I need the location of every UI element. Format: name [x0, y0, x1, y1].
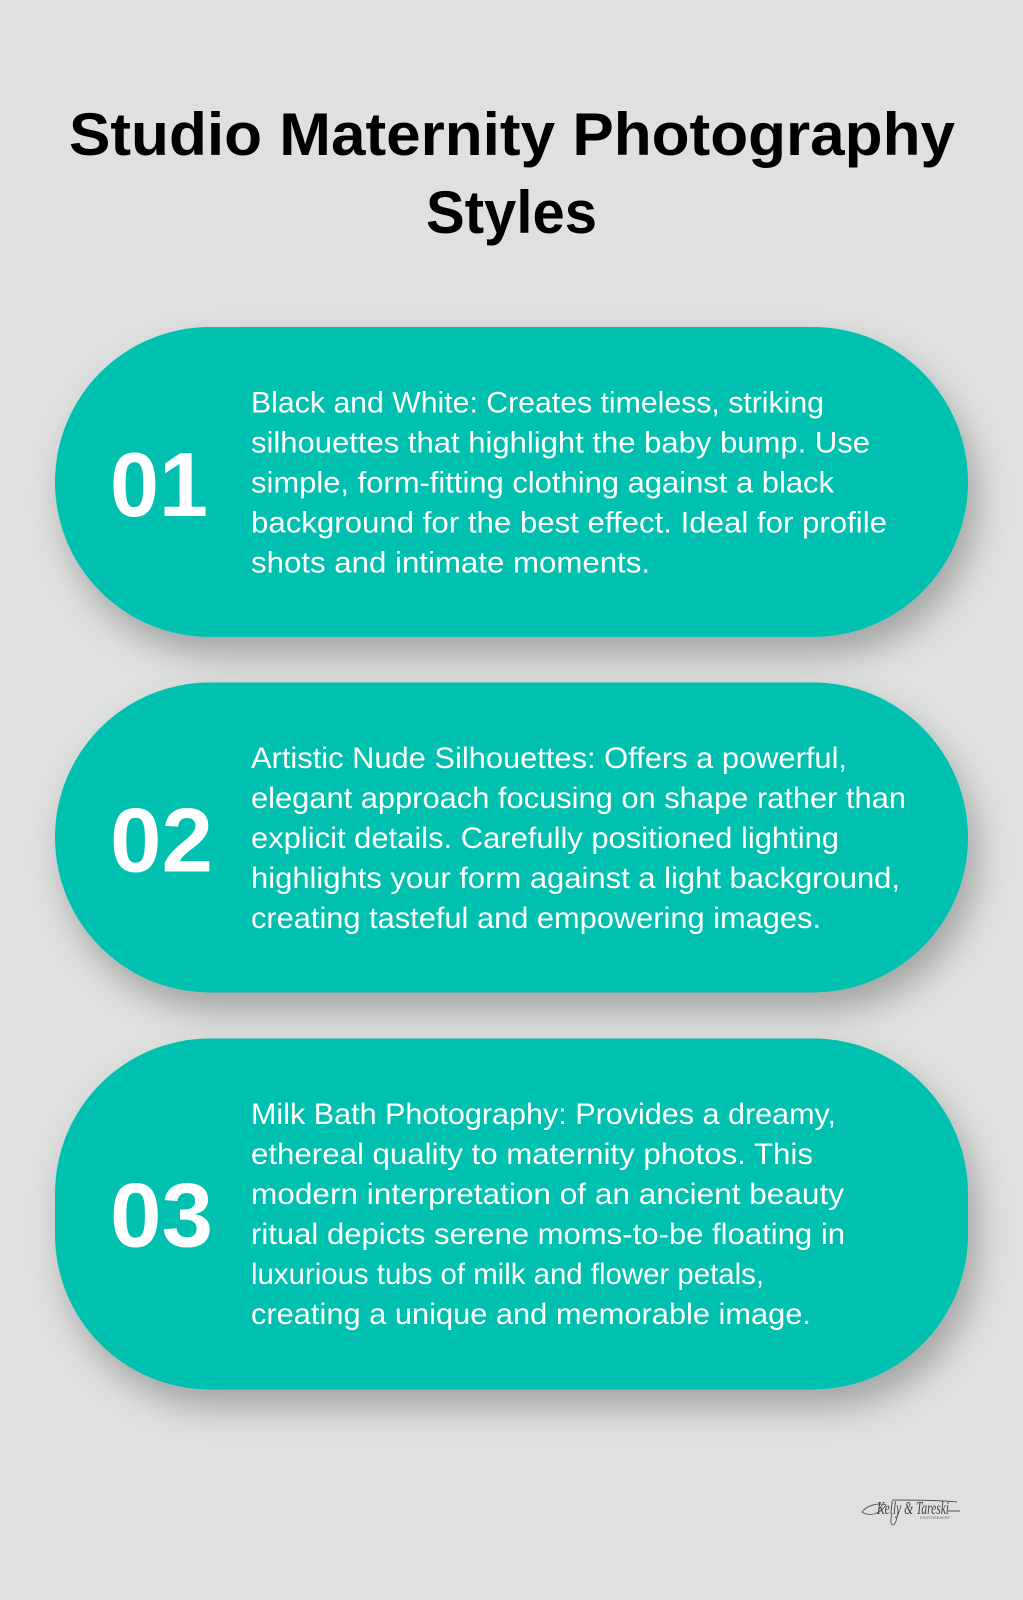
text block 03: creating a unique and memorable image. — [251, 1298, 811, 1331]
pill background 01 — [55, 327, 968, 637]
logo: signature — [862, 1498, 960, 1525]
text block 02 — [251, 742, 906, 935]
text block 02: highlights your form against a light background, — [251, 862, 900, 895]
logo: signature: Kelly & Tareski — [876, 1498, 949, 1518]
text block 02: explicit details. Carefully positioned lighting — [251, 822, 839, 855]
number 03: 03 — [110, 1166, 213, 1266]
title — [69, 101, 956, 246]
text block 03: modern interpretation of an ancient beauty — [251, 1178, 844, 1211]
number 01: 01 — [110, 435, 208, 536]
panel: 03 milk bath photography — [55, 1038, 968, 1390]
text block 02: elegant approach focusing on shape rather than — [251, 782, 906, 815]
text block 03: ritual depicts serene moms-to-be floating in — [251, 1218, 845, 1251]
text block 03: Milk Bath Photography: Provides a dreamy, — [251, 1098, 836, 1131]
text block 01: Black and White: Creates timeless, striking — [251, 386, 824, 420]
text block 02: creating tasteful and empowering images. — [251, 902, 821, 935]
text block 01: shots and intimate moments. — [251, 546, 650, 580]
text block 01: background for the best effect. Ideal for profile — [251, 506, 887, 540]
pill background 02 — [55, 682, 968, 992]
text block 03: luxurious tubs of milk and flower petals, — [251, 1258, 764, 1291]
panel: 02 artistic nude silhouettes — [55, 682, 968, 992]
text block 01 — [251, 386, 887, 580]
title: Studio Maternity Photography — [69, 101, 956, 168]
text block 01: simple, form-fitting clothing against a black — [251, 466, 835, 500]
text block 02: Artistic Nude Silhouettes: Offers a powerful, — [251, 742, 847, 775]
title: Styles — [426, 179, 597, 246]
pill background 03 — [55, 1038, 968, 1390]
logo: signature: PHOTOGRAPHY — [920, 1516, 951, 1520]
text block 01: silhouettes that highlight the baby bump. Use — [251, 426, 870, 460]
number 02: 02 — [110, 790, 213, 892]
panel: 01 black and white — [55, 327, 968, 637]
text block 03 — [251, 1098, 845, 1331]
text block 03: ethereal quality to maternity photos. This — [251, 1138, 813, 1171]
